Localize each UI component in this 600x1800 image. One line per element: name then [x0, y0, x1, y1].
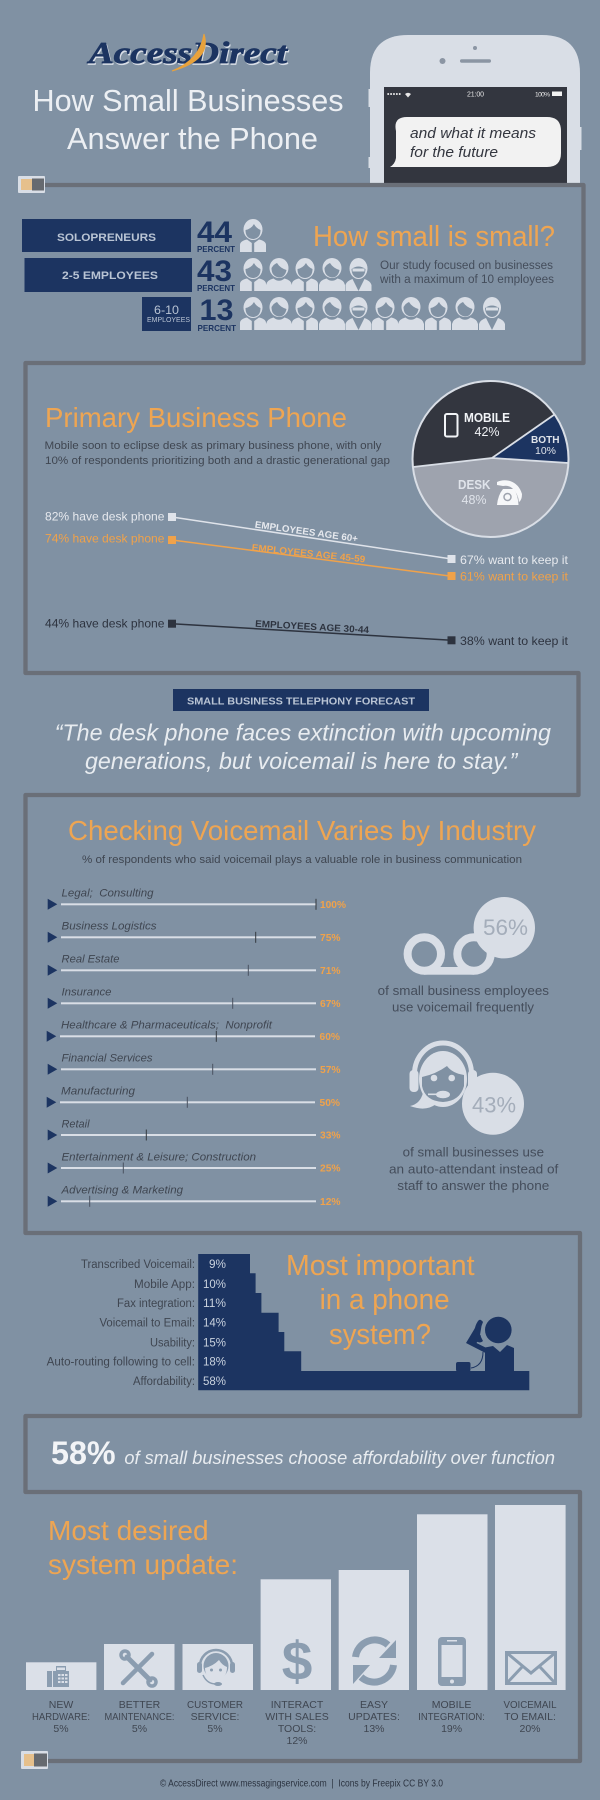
icon: headset agent 43%: 43%	[472, 1093, 516, 1118]
bar: interact with sales tools: TOOLS:	[278, 1723, 316, 1735]
row: advertising marketing	[48, 1185, 341, 1208]
bar: mobile integration	[417, 1514, 488, 1735]
bar: customer service: CUSTOMER	[187, 1699, 243, 1711]
bar: solopreneurs: 44	[197, 216, 232, 249]
pie chart: primary phone: MOBILE	[464, 411, 510, 425]
chart labels: Mobile App:	[134, 1279, 195, 1291]
bar: 6-10 employees: PERCENT	[198, 323, 237, 333]
row: financial services: Financial Services	[62, 1053, 153, 1065]
row: legal consulting: 100%	[320, 900, 346, 911]
chart labels: Fax integration:	[117, 1298, 195, 1310]
bar: easy updates: UPDATES:	[348, 1711, 400, 1723]
chart labels: Voicemail to Email:	[100, 1318, 195, 1330]
chart: stair steps: 10%	[203, 1277, 226, 1291]
row: financial services	[48, 1053, 341, 1076]
icon: smartphone with message bubble: •••••	[387, 92, 402, 98]
chart labels: Usability:	[150, 1338, 195, 1350]
icon: smartphone with message bubble: 21:00	[467, 92, 484, 98]
heading: most desired	[48, 1515, 238, 1580]
row: manufacturing	[47, 1086, 340, 1109]
pie chart: primary phone: DESK	[458, 478, 490, 492]
slope line: employees age 30-44	[45, 617, 569, 648]
bar: 2-5 employees	[24, 255, 372, 293]
slope line: employees age 60+	[45, 510, 569, 567]
text block: voicemail stat	[378, 983, 549, 1015]
row: advertising marketing: 12%	[320, 1197, 341, 1208]
row: legal consulting: Legal; Consulting	[62, 888, 154, 900]
text block: study note: with a maximum of 10 employees	[379, 274, 554, 286]
icon: smartphone with message bubble	[368, 35, 582, 184]
chart: stair steps: 18%	[203, 1355, 226, 1369]
slope line: employees age 45-59: 61% want to keep it	[460, 570, 569, 584]
bar: better maintenance	[104, 1644, 174, 1735]
pie chart: primary phone: 42%	[474, 425, 500, 439]
bar: solopreneurs	[22, 216, 266, 254]
bar: 2-5 employees: 43	[197, 255, 232, 288]
row: business logistics: 75%	[320, 933, 341, 944]
row: manufacturing: 50%	[320, 1098, 340, 1109]
bar: easy updates: EASY	[360, 1699, 388, 1711]
icon: smartphone with message bubble: 100%	[535, 92, 550, 98]
badge: forecast	[173, 689, 429, 711]
heading: most important: in a phone	[320, 1284, 450, 1316]
bar: 2-5 employees: 2-5 EMPLOYEES	[62, 270, 158, 282]
bar: mobile integration: MOBILE	[432, 1699, 471, 1711]
bar: easy updates	[339, 1570, 409, 1735]
chart: stair steps: 14%	[203, 1316, 226, 1330]
panel: most desired system update	[26, 1505, 566, 1747]
text block: mobile summary: 10% of respondents prioritizing both and a drastic generational gap	[45, 455, 390, 467]
text block: mobile summary: Mobile soon to eclipse desk as primary business phone, with only	[44, 440, 382, 452]
bar: new hardware	[26, 1662, 96, 1735]
row: retail: 33%	[320, 1130, 341, 1142]
text block: auto-attendant stat: of small businesses use	[403, 1145, 544, 1160]
heading: most important: Most important	[286, 1250, 475, 1282]
panel: telephony forecast	[55, 689, 551, 774]
callout: 58% affordability: 58%	[51, 1435, 116, 1471]
icon: bottom ethernet plug	[21, 1751, 48, 1769]
logo: AccessDirect: AccessDirect	[87, 35, 289, 70]
heading: primary business phone: Primary Business Phone	[45, 402, 347, 433]
heading: checking voicemail: Checking Voicemail Varies by Industry	[68, 815, 536, 846]
icon: voicemail 56%: 56%	[483, 915, 528, 940]
icon: smartphone with message bubble: for the future	[410, 144, 498, 161]
callout: 58% affordability: of small businesses choose affordability over function	[124, 1447, 555, 1468]
bar: voicemail to email	[495, 1505, 566, 1735]
row: legal consulting	[48, 888, 346, 911]
quote	[55, 720, 551, 774]
bar: voicemail to email: 20%	[519, 1723, 541, 1735]
row: insurance	[48, 987, 341, 1010]
footer credit: © AccessDirect www.messagingservice.com | Icons by Freepix CC BY 3.0	[160, 1779, 443, 1790]
bar: 6-10 employees: 13	[200, 294, 234, 327]
icon: headset agent 43%	[410, 1043, 524, 1135]
icon: person on phone	[456, 1317, 514, 1372]
text block: auto-attendant stat: an auto-attendant instead of	[389, 1161, 559, 1176]
row: entertainment construction: 25%	[320, 1164, 341, 1174]
text block: mobile summary	[44, 440, 390, 467]
icon: voicemail 56%	[408, 897, 535, 975]
logo: AccessDirect: AccessDirect	[88, 36, 290, 72]
quote: “The desk phone faces extinction with upcoming	[55, 720, 551, 746]
bar: new hardware: NEW	[49, 1699, 73, 1711]
chart: stair steps: 9%	[209, 1257, 226, 1271]
text block: voicemail stat: use voicemail frequently	[392, 1000, 535, 1015]
slope line: employees age 30-44: EMPLOYEES AGE 30-44	[255, 619, 370, 636]
slope line: employees age 60+: 67% want to keep it	[460, 553, 569, 567]
bar: better maintenance: BETTER	[119, 1699, 161, 1711]
row: manufacturing: Manufacturing	[61, 1086, 136, 1098]
title: Answer the Phone	[67, 122, 318, 156]
row: real estate	[48, 954, 341, 977]
icon: top ethernet plug	[18, 176, 45, 193]
bar: interact with sales tools	[261, 1579, 331, 1747]
bar: interact with sales tools: WITH SALES	[265, 1711, 329, 1723]
pie chart: primary phone: 10%	[535, 445, 556, 457]
bar: easy updates: 13%	[363, 1723, 385, 1735]
slope line: employees age 60+: 82% have desk phone	[45, 510, 165, 524]
text block: study note: Our study focused on businesses	[380, 260, 553, 272]
bar: mobile integration: 19%	[441, 1723, 462, 1735]
chart: stair steps	[198, 1254, 529, 1390]
heading: how small is small: How small is small?	[313, 221, 555, 253]
bar: 2-5 employees: PERCENT	[197, 283, 236, 293]
row: retail: Retail	[62, 1118, 90, 1130]
chart: stair steps: 15%	[203, 1336, 226, 1350]
text block: study note	[379, 260, 554, 286]
heading: most important	[286, 1250, 475, 1351]
pie chart: primary phone: 48%	[462, 493, 486, 507]
bar: interact with sales tools: $	[282, 1630, 312, 1692]
slope line: employees age 45-59: EMPLOYEES AGE 45-59	[251, 543, 366, 565]
heading: most desired: Most desired	[48, 1515, 209, 1546]
chart: stair steps: 11%	[203, 1296, 226, 1310]
callout: 58% affordability	[51, 1435, 555, 1471]
icon: smartphone with message bubble: and what it means	[410, 125, 537, 142]
panel: primary business phone	[44, 381, 569, 648]
slope line: employees age 30-44: 44% have desk phone	[45, 617, 165, 631]
bar: 6-10 employees	[142, 294, 505, 333]
chart labels	[47, 1259, 195, 1388]
row: insurance: Insurance	[62, 987, 112, 999]
panel: how small is small	[22, 216, 555, 333]
bar: voicemail to email: VOICEMAIL	[504, 1699, 557, 1711]
row: healthcare nonprofit	[47, 1020, 340, 1043]
row: healthcare nonprofit: 60%	[320, 1032, 340, 1043]
bar: mobile integration: INTEGRATION:	[418, 1711, 485, 1723]
row: advertising marketing: Advertising & Marketing	[60, 1185, 184, 1197]
chart labels: Affordability:	[133, 1376, 195, 1388]
pie chart: primary phone: BOTH	[531, 434, 560, 446]
bar: new hardware: 5%	[53, 1723, 69, 1735]
quote: generations, but voicemail is here to stay.”	[85, 748, 519, 774]
bar: better maintenance: MAINTENANCE:	[104, 1711, 174, 1723]
row: entertainment construction	[48, 1151, 341, 1174]
row: real estate: Real Estate	[62, 954, 120, 966]
title	[32, 84, 344, 156]
bar: better maintenance: 5%	[132, 1723, 147, 1735]
slope line: employees age 45-59	[45, 532, 569, 584]
badge: forecast: SMALL BUSINESS TELEPHONY FORECAST	[187, 696, 416, 708]
slope line: employees age 30-44: 38% want to keep it	[460, 634, 569, 648]
bar: interact with sales tools: INTERACT	[271, 1699, 324, 1711]
bar: customer service: 5%	[207, 1723, 223, 1735]
bar: interact with sales tools: 12%	[286, 1735, 308, 1747]
heading: most important: system?	[329, 1319, 431, 1351]
text block: survey note: % of respondents who said voicemail plays a valuable role in business communication	[82, 854, 522, 866]
row: financial services: 57%	[320, 1065, 341, 1076]
bar: 6-10 employees: 6-10	[154, 305, 179, 317]
bar: solopreneurs: PERCENT	[197, 244, 236, 254]
panel: most important in a phone system	[47, 1250, 529, 1390]
bar: 6-10 employees: EMPLOYEES	[147, 315, 190, 324]
row: insurance: 67%	[320, 999, 341, 1010]
heading: most desired: system update:	[48, 1549, 238, 1580]
chart labels: Transcribed Voicemail:	[81, 1259, 195, 1271]
title: How Small Businesses	[32, 84, 344, 118]
text block: auto-attendant stat: staff to answer the phone	[397, 1178, 549, 1193]
slope line: employees age 45-59: 74% have desk phone	[45, 532, 165, 546]
row: healthcare nonprofit: Healthcare & Pharmaceuticals; Nonprofit	[61, 1020, 273, 1032]
bar: voicemail to email: TO EMAIL:	[504, 1711, 556, 1723]
row: retail	[48, 1118, 341, 1142]
row: entertainment construction: Entertainment & Leisure; Construction	[62, 1151, 256, 1163]
row: real estate: 71%	[320, 966, 341, 977]
panel: checking voicemail by industry	[47, 815, 559, 1208]
bar: customer service	[182, 1644, 253, 1735]
bar: solopreneurs: SOLOPRENEURS	[57, 232, 156, 244]
row: business logistics: Business Logistics	[62, 921, 157, 933]
pie chart: primary phone	[412, 381, 569, 537]
text block: auto-attendant stat	[389, 1145, 559, 1193]
slope line: employees age 60+: EMPLOYEES AGE 60+	[254, 520, 359, 545]
bar: new hardware: HARDWARE:	[32, 1711, 90, 1723]
chart labels: Auto-routing following to cell:	[47, 1357, 195, 1369]
bar: customer service: SERVICE:	[191, 1711, 239, 1723]
row: business logistics	[48, 921, 341, 944]
chart: stair steps: 58%	[203, 1374, 226, 1388]
text block: voicemail stat: of small business employees	[378, 983, 549, 998]
